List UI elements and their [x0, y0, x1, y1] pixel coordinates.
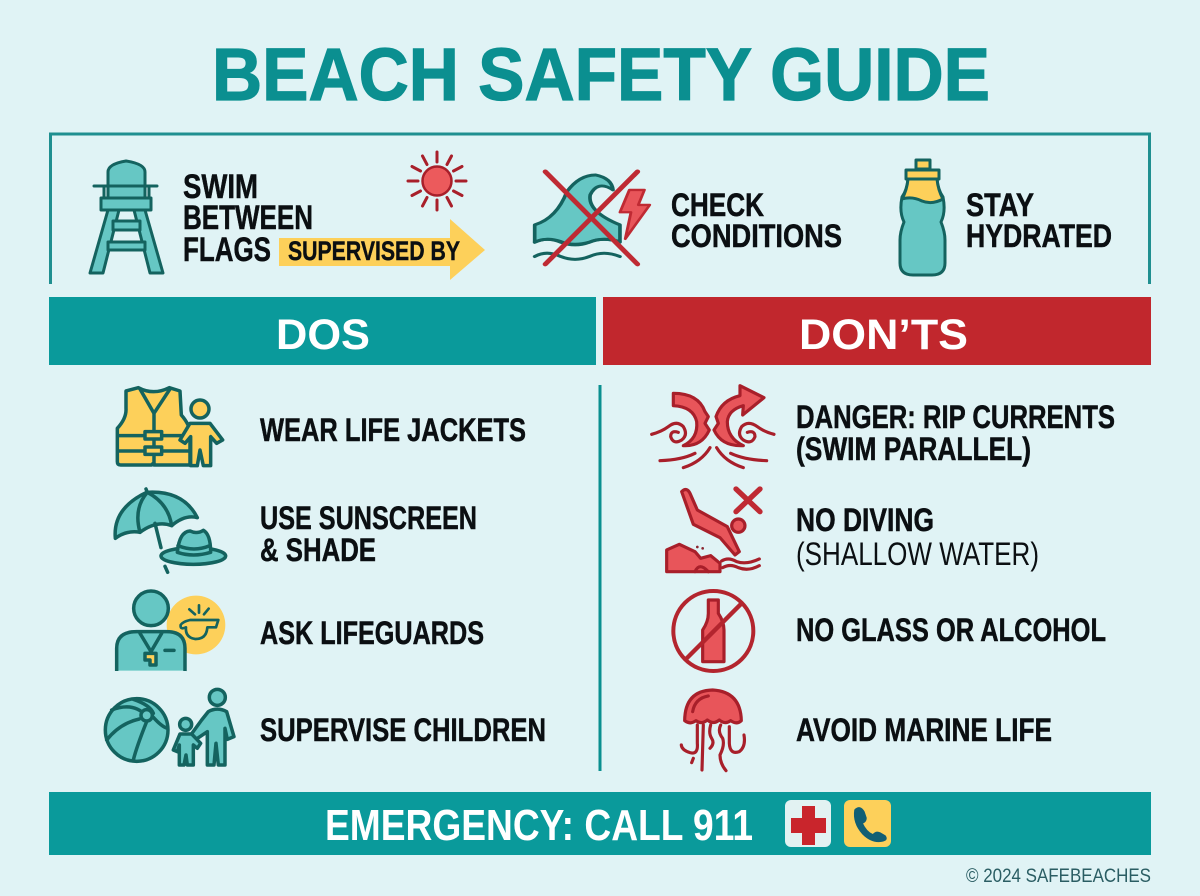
text: check conditions: CONDITIONS [671, 218, 842, 254]
icon: red cross [785, 800, 831, 847]
heading: don'ts: DON’TS [799, 311, 968, 359]
footer: emergency banner [49, 792, 1151, 855]
icon: jellyfish [681, 690, 744, 771]
icon: no glass bottle [673, 591, 753, 671]
text: swim between flags: BETWEEN [183, 199, 313, 237]
icon: no diving [667, 489, 760, 572]
icon: sun [408, 152, 466, 210]
text: swim between flags [183, 168, 313, 269]
icon: lifeguard chair [90, 161, 163, 273]
text: supervise children: SUPERVISE CHILDREN [260, 712, 546, 748]
text: swim between flags: FLAGS [183, 231, 271, 269]
icon: rip currents [652, 386, 774, 468]
text: no diving shallow water: NO DIVING [796, 502, 934, 538]
text: danger rip currents: (SWIM PARALLEL) [796, 431, 1031, 467]
heading: don'ts [603, 297, 1151, 365]
icon: lifeguard with whistle [115, 591, 225, 672]
text: emergency call: EMERGENCY: CALL 911 [325, 801, 753, 850]
text: avoid marine life: AVOID MARINE LIFE [796, 712, 1052, 748]
text: no diving shallow water: (SHALLOW WATER) [796, 536, 1039, 572]
icon: water bottle [900, 160, 945, 275]
title: BEACH SAFETY GUIDE [212, 33, 990, 116]
text: ask lifeguards: ASK LIFEGUARDS [260, 615, 484, 651]
text: check conditions [671, 187, 842, 254]
text: wear life jackets: WEAR LIFE JACKETS [260, 412, 526, 448]
panel: dos list [105, 388, 546, 765]
icon: crossed-out wave and lightning [535, 172, 650, 264]
icon: phone [844, 800, 891, 847]
icon: life jacket and child [117, 388, 223, 466]
text: check conditions: CHECK [671, 187, 764, 223]
copyright: © 2024 SAFEBEACHES [966, 866, 1151, 887]
text: stay hydrated: HYDRATED [966, 218, 1112, 254]
text: danger rip currents: DANGER: RIP CURRENTS [796, 399, 1115, 435]
icon: beach ball and family [105, 689, 234, 765]
text: stay hydrated [966, 187, 1112, 254]
text: stay hydrated: STAY [966, 187, 1034, 223]
arrow: supervised by [279, 219, 485, 280]
heading: dos [49, 297, 596, 365]
arrow: supervised by: SUPERVISED BY [288, 236, 460, 266]
text: use sunscreen and shade: USE SUNSCREEN [260, 500, 477, 536]
panel: don'ts list [652, 386, 1115, 771]
panel: key safety tips [50, 134, 1150, 284]
heading: dos: DOS [276, 311, 370, 359]
text: use sunscreen and shade: & SHADE [260, 532, 376, 568]
text: no diving shallow water [796, 502, 1039, 572]
icon: umbrella and hat [115, 489, 226, 572]
text: no glass or alcohol: NO GLASS OR ALCOHOL [796, 612, 1106, 648]
text: swim between flags: SWIM [183, 168, 258, 206]
text: danger rip currents [796, 399, 1115, 467]
text: use sunscreen and shade [260, 500, 477, 568]
